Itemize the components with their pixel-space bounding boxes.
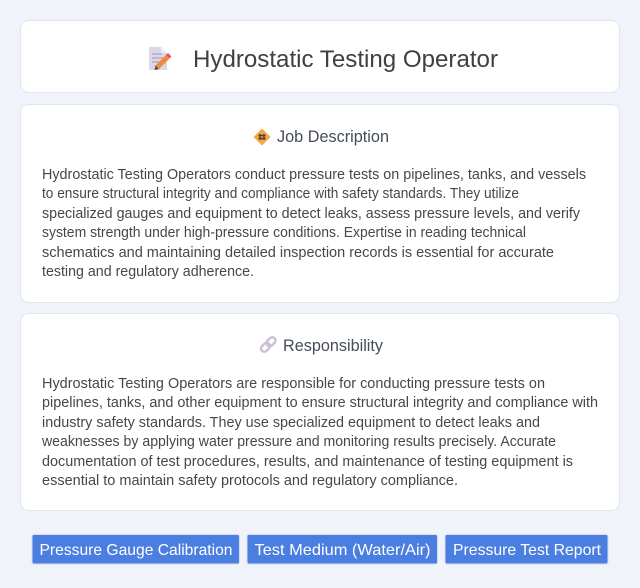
- tag: pressure test report: Pressure Test Report: [453, 542, 602, 559]
- text block: job description: Hydrostatic Testing Operators conduct pressure tests on pipelines, tanks, and vessels: [42, 167, 586, 183]
- text block: responsibility: [41, 376, 598, 489]
- tag: test medium: Test Medium (Water/Air): [254, 542, 430, 559]
- text block: responsibility: documentation of test procedures, results, and maintenance of testing equipment is: [42, 454, 573, 470]
- text block: job description: specialized gauges and equipment to detect leaks, assess pressure levels, and verify: [42, 206, 581, 222]
- text block: job description: schematics and maintaining detailed inspection records is essential for accurate: [42, 245, 554, 261]
- tag: test medium: [247, 534, 438, 564]
- text block: responsibility: essential to maintain safety protocols and regulatory compliance.: [42, 473, 458, 489]
- text block: responsibility: weaknesses by applying water pressure and monitoring results precisely. Accurate: [41, 434, 556, 450]
- text block: responsibility: industry safety standards. They use specialized equipment to detect leaks and: [42, 415, 540, 431]
- icon: construction diamond: [254, 128, 270, 146]
- text block: responsibility: Hydrostatic Testing Operators are responsible for conducting pressure tests on: [42, 376, 545, 392]
- icon: document with pencil: [149, 47, 172, 70]
- tag: pressure test report: [445, 534, 608, 564]
- text block: responsibility: pipelines, tanks, and other equipment to ensure structural integrity and compliance with: [42, 395, 598, 411]
- text block: job description: to ensure structural integrity and compliance with safety standards. They utilize: [42, 186, 519, 202]
- text block: job description: testing and regulatory adherence.: [42, 264, 254, 280]
- text block: job description: system strength under high-pressure conditions. Expertise in reading technical: [42, 225, 526, 241]
- panel: job description: [20, 104, 620, 302]
- title: Hydrostatic Testing Operator: [193, 46, 498, 73]
- panel: title card: [20, 20, 620, 92]
- tag: pressure gauge calibration: Pressure Gauge Calibration: [40, 542, 232, 559]
- text block: job description: [42, 167, 586, 280]
- heading: responsibility: Responsibility: [283, 337, 384, 355]
- heading: job description: Job Description: [277, 128, 389, 146]
- tag: pressure gauge calibration: [32, 534, 240, 564]
- panel: responsibility: [20, 314, 620, 510]
- icon: chain link: [260, 336, 277, 353]
